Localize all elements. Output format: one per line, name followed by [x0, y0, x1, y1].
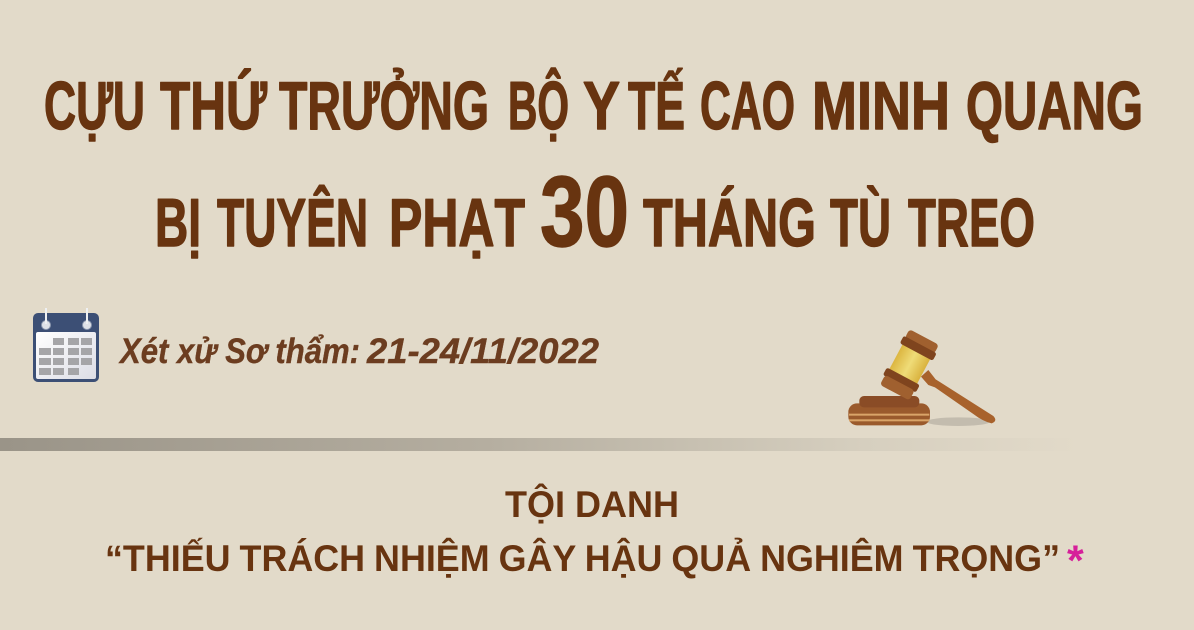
- title line 1: CAO: [700, 68, 795, 144]
- trial date: 21-24/11/2022: [366, 332, 600, 371]
- title line 1: MINH: [812, 68, 950, 144]
- trial date: Xét xử Sơ thẩm:: [118, 332, 360, 371]
- title line 2: THÁNG: [643, 185, 816, 261]
- title line 2: [155, 156, 1035, 268]
- title line 1: TRƯỞNG: [279, 67, 489, 144]
- icon: gavel: [848, 328, 995, 426]
- title line 2: PHẠT: [389, 185, 525, 261]
- title line 1: Y: [583, 68, 620, 144]
- title line 2: TÙ: [830, 185, 891, 261]
- title line 2: TREO: [908, 185, 1035, 261]
- charge label: TỘI DANH: [505, 483, 679, 525]
- title line 1: CỰU: [44, 68, 145, 144]
- trial date: [118, 332, 600, 371]
- title line 2: TUYÊN: [217, 184, 368, 261]
- title line 1: [44, 67, 1143, 144]
- title: [44, 67, 1143, 268]
- title line 1: BỘ: [508, 67, 569, 144]
- title line 2: BỊ: [155, 185, 201, 261]
- divider bar: [0, 438, 1080, 451]
- title line 1: TẾ: [628, 67, 685, 144]
- title line 2: 30: [540, 156, 629, 268]
- charge name: “THIẾU TRÁCH NHIỆM GÂY HẬU QUẢ NGHIÊM TRỌNG”: [105, 537, 1060, 579]
- title line 1: THỨ: [160, 68, 267, 144]
- asterisk: *: [1067, 537, 1084, 585]
- icon: calendar: [33, 308, 99, 382]
